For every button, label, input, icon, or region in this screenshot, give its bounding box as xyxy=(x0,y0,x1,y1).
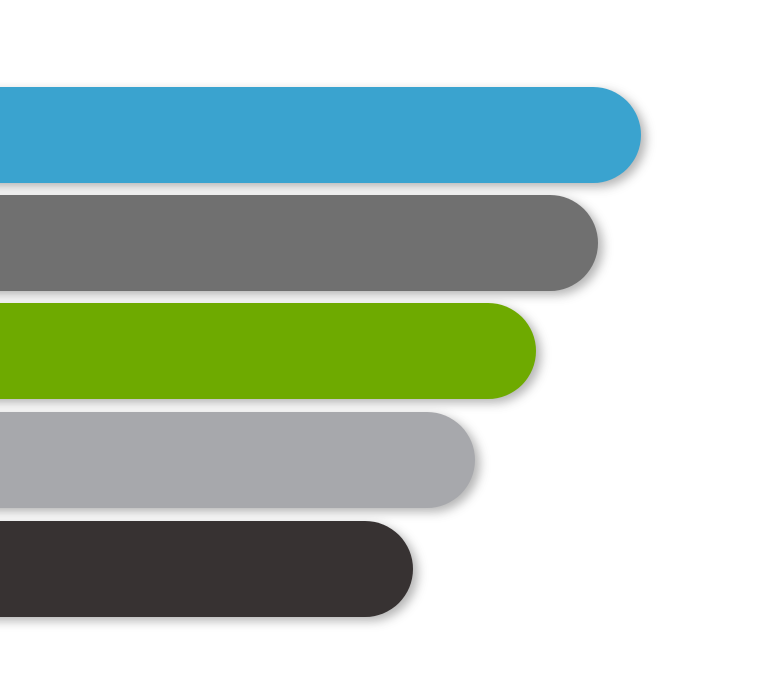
bar 4: light gray xyxy=(0,412,475,508)
bar 2: dark gray xyxy=(0,195,598,291)
bar 3: green xyxy=(0,303,536,399)
bar 1: blue xyxy=(0,87,641,183)
bar 5: near black xyxy=(0,521,413,617)
